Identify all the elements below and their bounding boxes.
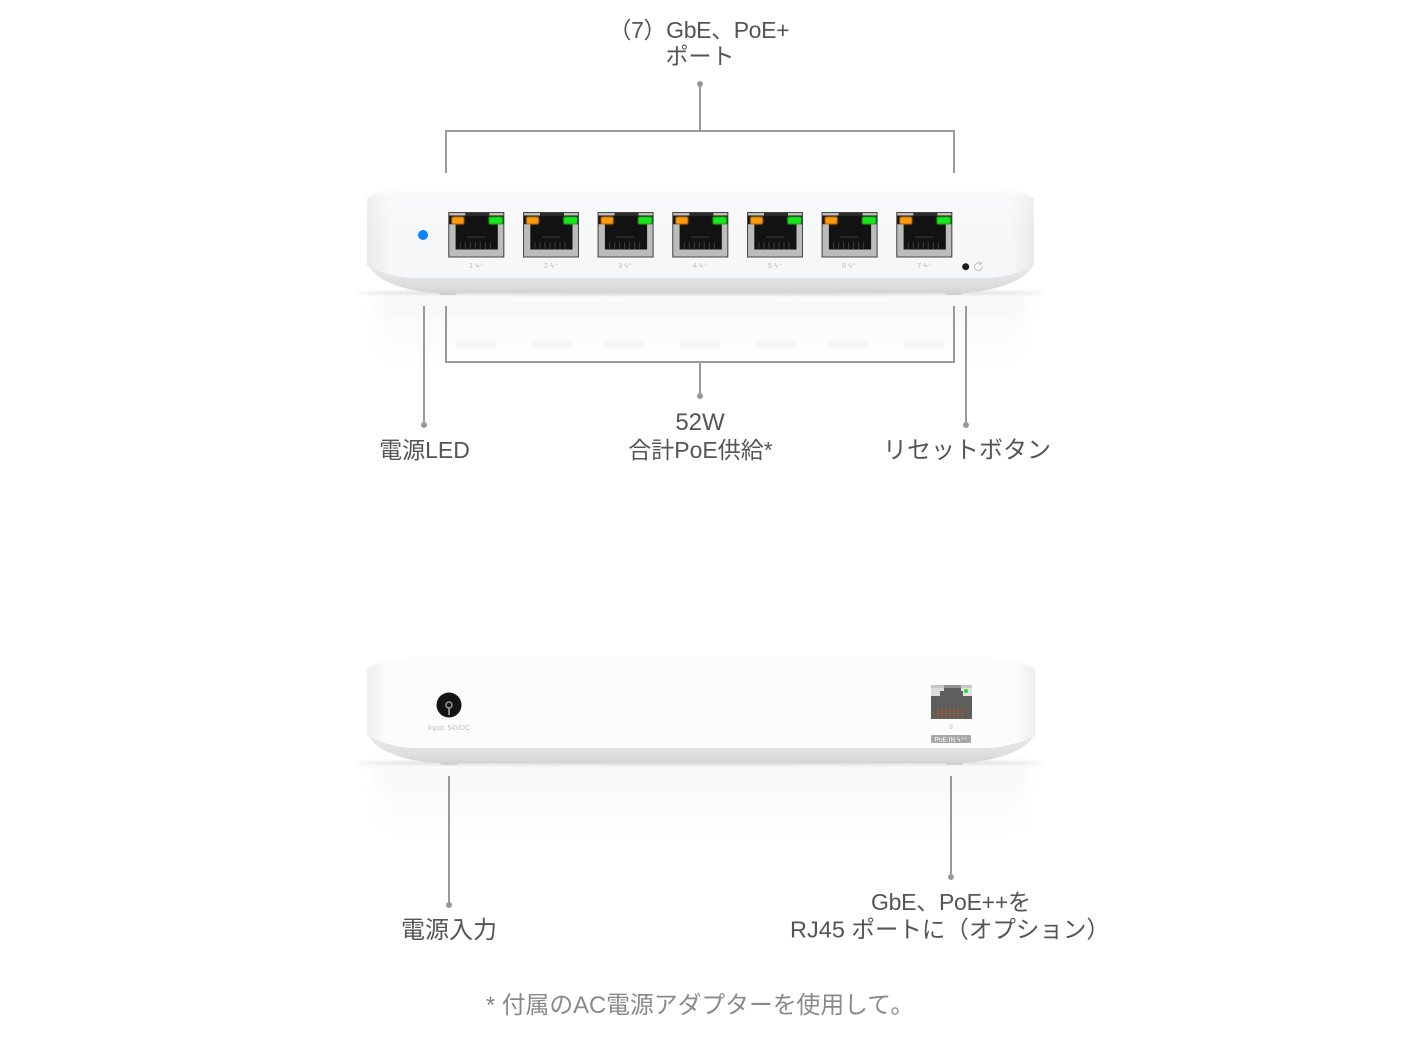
- leader: RJ45 port: [948, 776, 954, 880]
- port number labels: 2 ϟ⁺: [544, 261, 558, 270]
- label: PoE budget: [628, 409, 773, 463]
- label: PoE budget: 合計PoE供給*: [628, 437, 773, 463]
- panel: front of switch: [355, 186, 1045, 368]
- label: port 8 number: 8: [949, 724, 953, 731]
- bracket: top ports callout: [446, 81, 954, 173]
- label: power LED: 電源LED: [379, 437, 470, 463]
- icon: power LED: [418, 230, 428, 240]
- title: PoE+ ports label: [608, 17, 790, 69]
- port number labels: 6 ϟ⁺: [842, 261, 856, 270]
- device lower lip: back: [367, 732, 1035, 763]
- label: reset button: リセットボタン: [883, 437, 1051, 464]
- label: RJ45 optional port: GbE、PoE++を: [871, 889, 1031, 915]
- feet: back: [439, 763, 964, 765]
- title: PoE+ ports label: （7）GbE、PoE+: [608, 17, 790, 43]
- port number labels: 4 ϟ⁺: [693, 261, 707, 270]
- port 7: [896, 212, 952, 258]
- feet: front: [438, 293, 964, 295]
- bracket: PoE budget callout: [446, 306, 954, 399]
- port 1: [448, 212, 504, 258]
- shadow: front: [355, 291, 1045, 295]
- label: power input: 電源入力: [401, 917, 497, 944]
- port 8: PoE in: [931, 685, 972, 719]
- port number labels: [469, 261, 931, 270]
- device top highlight: front: [367, 186, 1034, 240]
- title: PoE+ ports label: ポート: [666, 43, 734, 69]
- panel: back of switch: [355, 657, 1045, 838]
- device lower lip: front: [367, 262, 1034, 293]
- label: RJ45 optional port: RJ45 ポートに（オプション）: [790, 916, 1110, 942]
- label: PoE budget: 52W: [675, 409, 725, 436]
- label: RJ45 optional port: [790, 889, 1110, 942]
- badge: PoE IN: [931, 735, 971, 744]
- leader: power LED: [421, 306, 427, 428]
- leader: power input: [446, 776, 452, 908]
- port 6: [822, 212, 878, 258]
- port number labels: 7 ϟ⁺: [917, 261, 931, 270]
- leader: reset button: [963, 306, 969, 428]
- port 4: [672, 212, 728, 258]
- shadow: back: [355, 761, 1045, 765]
- port 5: [747, 212, 803, 258]
- reflection: back: [376, 766, 1026, 838]
- icon: DC power jack: [436, 692, 462, 718]
- badge: PoE IN: PoE IN ϟ⁺⁺: [935, 736, 968, 744]
- icon: reset button: [962, 262, 982, 271]
- port number labels: 5 ϟ⁺: [768, 261, 782, 270]
- port 2: [523, 212, 579, 258]
- device body: front: [367, 186, 1034, 278]
- footnote: * 付属のAC電源アダプターを使用して。: [486, 992, 914, 1019]
- device body: back: [367, 657, 1035, 748]
- reflected ports: [456, 340, 944, 348]
- port number labels: 3 ϟ⁺: [618, 261, 632, 270]
- port 3: [598, 212, 654, 258]
- label: input voltage: Input: 54VDC: [428, 725, 470, 732]
- port number labels: 1 ϟ⁺: [469, 261, 483, 270]
- reflection: front: [376, 296, 1025, 368]
